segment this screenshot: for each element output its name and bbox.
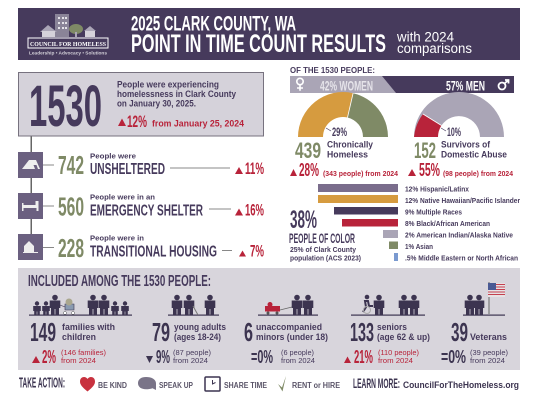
subtitle: comparisons (397, 41, 472, 56)
group: families: from 2024 (61, 356, 96, 365)
footer: take action: SPEAK UP (159, 381, 194, 390)
panel: total count (18, 72, 264, 139)
stat: people of color: population (ACS 2023) (290, 254, 362, 262)
group: seniors: seniors (377, 322, 407, 333)
icon: bed (18, 193, 43, 219)
bar chart: people of color: 12% Native Hawaiian/Pacific Islander (405, 196, 520, 205)
stat: chronically homeless: (343 people) from 2024 (323, 169, 399, 178)
row: unsheltered: UNSHELTERED (90, 161, 165, 178)
gender banner: 42% WOMEN (320, 78, 373, 94)
group: families: 149 (30, 317, 56, 347)
title: 2025 CLARK COUNTY, WA (131, 12, 296, 36)
group: unaccompanied minors: unaccompanied (256, 322, 322, 333)
group: seniors: (110 people) (378, 348, 419, 357)
icon: female symbol (297, 78, 303, 91)
group: unaccompanied minors (244, 295, 328, 367)
icon: male symbol (498, 80, 508, 90)
group: seniors (344, 295, 430, 367)
learn more link: CouncilForTheHomeless.org (403, 380, 519, 391)
gender banner (290, 76, 514, 94)
logo: Council for the Homeless (28, 14, 108, 56)
row: unsheltered (18, 150, 264, 180)
stat: chronically homeless: 439 (295, 138, 321, 163)
stat: people of color: 38% (290, 206, 317, 234)
icon: wagon (265, 302, 292, 314)
group: young adults: young adults (174, 322, 226, 333)
icon: heart (80, 377, 95, 392)
footer: take action: SHARE TIME (224, 381, 268, 390)
group: unaccompanied minors: from 2024 (281, 356, 315, 365)
icon: tent (18, 152, 43, 178)
group: families (29, 295, 132, 367)
group: unaccompanied minors: minors (under 18) (256, 332, 328, 343)
group: seniors: 21% (354, 347, 373, 367)
title (131, 12, 386, 58)
bar chart: people of color: 12% Hispanic/Latinx (405, 184, 469, 194)
group: veterans (441, 282, 508, 367)
group: families: 2% (42, 347, 56, 367)
stat: survivors of domestic abuse: Survivors of (441, 140, 491, 150)
group: seniors: (age 62 & up) (377, 332, 430, 343)
group: unaccompanied minors: =0% (251, 347, 273, 367)
panel: total count: People were experiencing (117, 80, 219, 90)
row: emergency shelter: 560 (58, 192, 84, 222)
heading: included among: INCLUDED AMONG THE 1530 PEOPLE: (28, 273, 211, 290)
icon: house (18, 234, 43, 260)
group: young adults: (ages 18-24) (174, 332, 221, 343)
group: seniors: 133 (350, 317, 374, 347)
stat: survivors of domestic abuse: 152 (414, 138, 436, 163)
stat: people of color (289, 206, 362, 262)
panel: total count: homelessness in Clark County (117, 89, 237, 100)
icon: wheelchair user (363, 295, 373, 314)
bar chart: people of color: 1% Asian (405, 242, 433, 251)
footer: take action: TAKE ACTION: (19, 376, 65, 392)
chart: chronically homeless gauge: 29% (332, 125, 347, 139)
bar chart: people of color: 2% American Indian/Alaska Native (405, 230, 513, 240)
stat: chronically homeless: Homeless (327, 150, 368, 160)
title: POINT IN TIME COUNT RESULTS (131, 30, 386, 58)
icon: stroller (60, 298, 74, 314)
row: unsheltered: 742 (58, 150, 84, 180)
row: emergency shelter: People were in an (90, 192, 155, 202)
bar chart: people of color: 9% Multiple Races (405, 208, 462, 216)
row: transitional housing (18, 233, 264, 263)
row: emergency shelter: 16% (245, 200, 264, 220)
group: young adults: 79 (152, 317, 170, 347)
icon: american flag (488, 282, 505, 314)
group: veterans: from 2024 (470, 356, 505, 365)
stat: people of color: 25% of Clark County (290, 245, 356, 254)
chart: domestic abuse gauge: 10% (447, 125, 461, 139)
footer: take action (19, 375, 519, 392)
group: veterans: (39 people) (470, 348, 508, 357)
row: unsheltered: 11% (245, 159, 264, 178)
learn more link: LEARN MORE: (353, 375, 400, 391)
chart: domestic abuse gauge (414, 92, 504, 139)
group: families: families with (62, 322, 115, 333)
group: young adults: 9% (156, 347, 170, 367)
panel: total count: 1530 (29, 74, 102, 139)
group: young adults: from 2024 (173, 356, 208, 365)
stat: chronically homeless (290, 138, 399, 180)
connector line (30, 136, 32, 236)
stat: survivors of domestic abuse: Domestic Abuse (441, 150, 507, 160)
icon: speech bubble (138, 377, 156, 390)
stat: survivors of domestic abuse (408, 138, 514, 180)
icon: clock (205, 377, 220, 391)
row: transitional housing: 7% (250, 242, 264, 260)
row: transitional housing: 228 (58, 233, 84, 263)
gender banner: 57% MEN (446, 78, 485, 94)
group: unaccompanied minors: (6 people) (281, 348, 314, 357)
bar chart: people of color: 8% Black/African American (405, 219, 490, 228)
subtitle (396, 30, 472, 56)
group: young adults: (87 people) (173, 348, 211, 357)
chart: chronically homeless gauge (298, 92, 388, 139)
learn more link (353, 375, 519, 391)
bar chart: people of color: .5% Middle Eastern or North African (405, 254, 518, 262)
stat: survivors of domestic abuse: (98 people) from 2024 (443, 169, 514, 178)
panel: total count: on January 30, 2025. (117, 98, 196, 110)
bar chart: people of color (318, 184, 520, 262)
row: unsheltered: People were (90, 152, 136, 160)
panel: total count: 12% (127, 112, 147, 131)
stat: survivors of domestic abuse: 55% (419, 160, 440, 180)
group: seniors: from 2024 (378, 356, 413, 365)
panel: total count: from January 25, 2024 (152, 118, 245, 130)
group: unaccompanied minors: 6 (244, 317, 253, 347)
stat: chronically homeless: 28% (299, 160, 319, 180)
subtitle: with 2024 (396, 30, 454, 44)
group: young adults (146, 295, 226, 367)
logo: Council for the Homeless: Leadership • Advocacy • Solutions (29, 50, 108, 56)
group: families: children (62, 332, 96, 343)
row: emergency shelter (18, 192, 264, 222)
panel: included among (18, 268, 520, 370)
stat: chronically homeless: Chronically (327, 140, 374, 150)
group: families: (146 families) (61, 348, 107, 357)
footer: take action: RENT or HIRE (292, 381, 341, 390)
footer: take action: BE KIND (98, 381, 127, 390)
row: transitional housing: TRANSITIONAL HOUSING (90, 244, 217, 260)
row: emergency shelter: EMERGENCY SHELTER (90, 202, 203, 220)
header banner (18, 8, 520, 60)
stat: people of color: PEOPLE OF COLOR (289, 230, 355, 246)
group: veterans: Veterans (470, 332, 507, 343)
logo: Council for the Homeless: COUNCIL FOR HOMELESS (30, 41, 106, 48)
heading: of the 1530 people: OF THE 1530 PEOPLE: (290, 66, 375, 75)
group: veterans: 39 (451, 317, 468, 347)
row: transitional housing: People were in (90, 234, 144, 242)
icon: check mark (278, 376, 286, 392)
group: veterans: =0% (441, 347, 466, 367)
